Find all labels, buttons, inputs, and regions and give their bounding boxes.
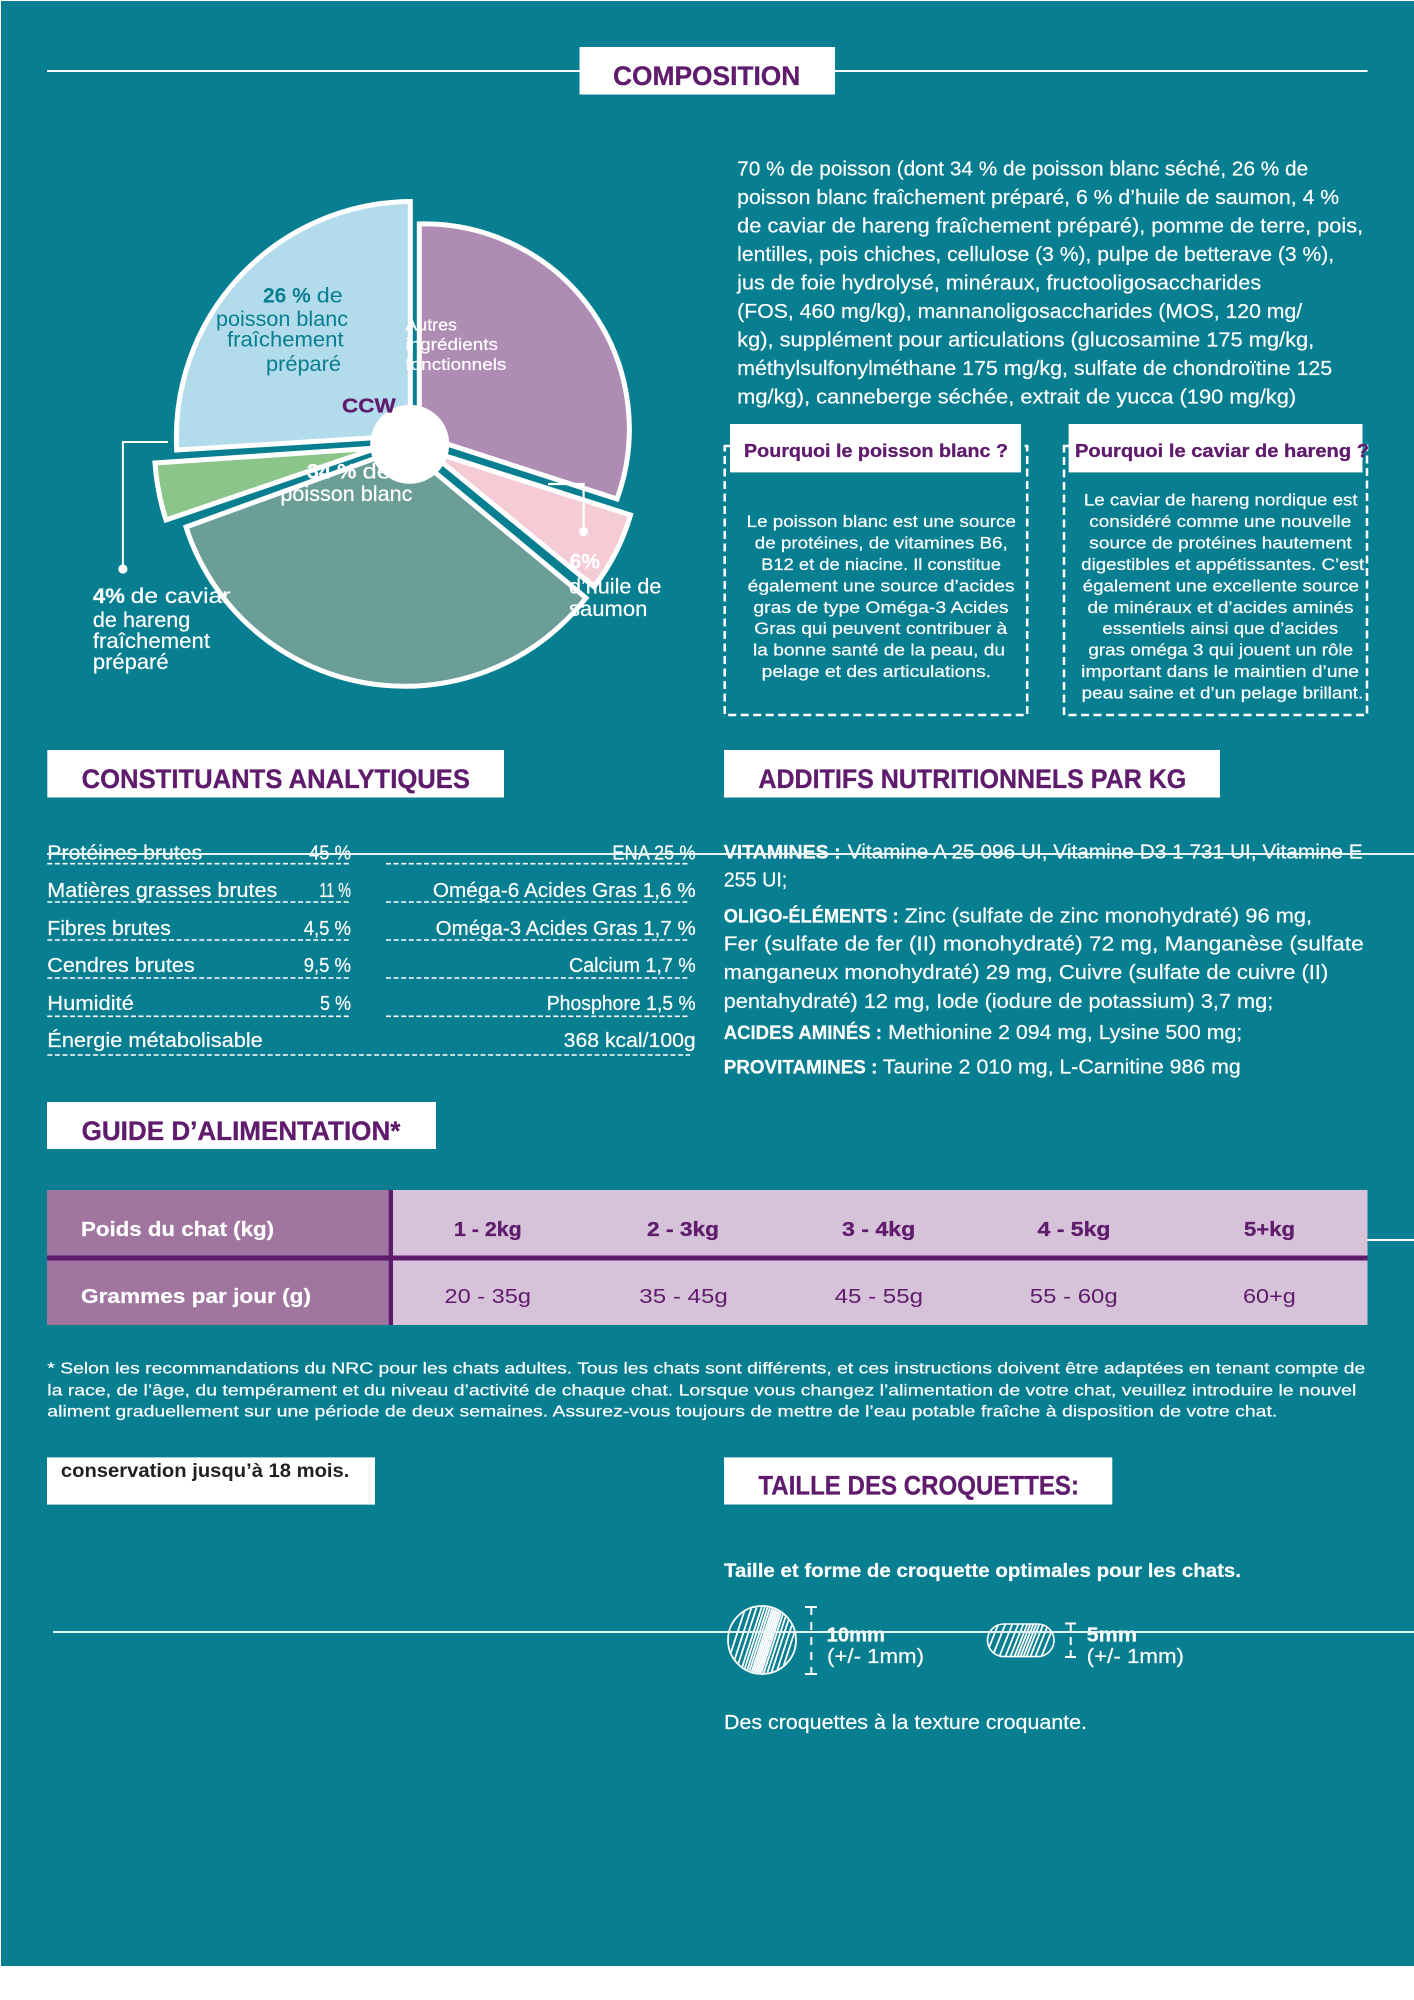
table: analytical constituents: 9,5 % — [304, 955, 351, 977]
panel text: why herring roe: peau saine et d’un pelage brillant. — [1082, 684, 1363, 702]
additives text: ACIDES AMINÉS : — [724, 1022, 882, 1044]
label: 34% dried white fish — [280, 459, 413, 506]
panel text: why white fish: pelage et des articulations. — [762, 663, 991, 681]
composition ingredients text: (FOS, 460 mg/kg), mannanoligosaccharides (MOS, 120 mg/ — [737, 300, 1303, 323]
panel text: why herring roe: de minéraux et d’acides aminés — [1088, 599, 1354, 617]
label: 4% herring roe: préparé — [93, 650, 169, 674]
panel text: why herring roe: important dans le maintien d’une — [1081, 663, 1359, 681]
label: 10mm: (+/- 1mm) — [827, 1646, 924, 1668]
row values: weights: 1 - 2kg — [454, 1219, 522, 1241]
additives text: OLIGO-ÉLÉMENTS : — [724, 905, 899, 927]
panel text: why white fish: Gras qui peuvent contribuer à — [754, 620, 1008, 638]
footnote: * Selon les recommandations du NRC pour les chats adultes. Tous les chats sont différents, et ces instructions doivent être adaptées en tenant compte de — [47, 1360, 1365, 1378]
composition ingredients text: poisson blanc fraîchement préparé, 6 % d’huile de saumon, 4 % — [737, 186, 1339, 209]
panel text: why herring roe: Le caviar de hareng nordique est — [1084, 492, 1358, 510]
label: 6% salmon oil: saumon — [569, 597, 647, 621]
table: analytical constituents: Cendres brutes — [47, 955, 195, 977]
additives text: 255 UI; — [724, 870, 787, 892]
label: 4% herring roe: 4% — [93, 584, 125, 608]
additives text: Vitamine A 25 096 UI, Vitamine D3 1 731 UI, Vitamine E — [848, 841, 1363, 863]
table: analytical constituents: Calcium 1,7 % — [569, 955, 696, 977]
pie centre hole — [370, 405, 449, 484]
label: 34% dried white fish: de — [362, 459, 391, 483]
panel text: why herring roe — [1081, 492, 1365, 702]
composition ingredients text: méthylsulfonylméthane 175 mg/kg, sulfate de chondroïtine 125 — [737, 357, 1332, 380]
panel heading: why herring roe: Pourquoi le caviar de hareng ? — [1075, 440, 1369, 461]
section heading: analytical constituents: CONSTITUANTS ANALYTIQUES — [82, 764, 470, 794]
callout: conservation: conservation jusqu’à 18 mois. — [61, 1460, 349, 1482]
label: 4% herring roe: de hareng — [93, 608, 190, 632]
table: analytical constituents: Oméga-6 Acides Gras 1,6 % — [433, 880, 696, 902]
panel: why white fish — [725, 424, 1027, 715]
additives text: Taurine 2 010 mg, L-Carnitine 986 mg — [883, 1056, 1241, 1078]
kibble intro text: Taille et forme de croquette optimales pour les chats. — [724, 1560, 1241, 1582]
panel text: why white fish: Le poisson blanc est une source — [747, 513, 1016, 531]
table: analytical constituents: 368 kcal/100g — [564, 1030, 696, 1052]
kibble texture text: Des croquettes à la texture croquante. — [724, 1712, 1087, 1734]
label: other functional ingredients — [405, 316, 506, 374]
additives text: PROVITAMINES : — [724, 1058, 877, 1078]
panel text: why herring roe: gras oméga 3 qui jouent un rôle — [1088, 642, 1353, 660]
panel text: why white fish — [747, 513, 1016, 681]
panel text: why white fish: B12 et de niacine. Il constitue — [761, 556, 1001, 574]
section heading: feeding guide: GUIDE D’ALIMENTATION* — [82, 1116, 401, 1146]
label: other functional ingredients: fonctionnels — [405, 355, 506, 374]
panel text: why herring roe: également une excellente source — [1083, 578, 1359, 596]
pie chart: composition — [93, 202, 661, 686]
row label: grams per day: Grammes par jour (g) — [81, 1286, 311, 1308]
label: 26% fresh white fish: fraîchement — [227, 328, 344, 352]
table: analytical constituents: ENA 25 % — [612, 843, 696, 865]
additives text: Fer (sulfate de fer (II) monohydraté) 72 mg, Manganèse (sulfate — [724, 934, 1364, 956]
segment: 4% herring roe — [155, 448, 377, 520]
additives text: Zinc (sulfate de zinc monohydraté) 96 mg, — [904, 905, 1312, 927]
table: analytical constituents: Matières grasses brutes — [47, 880, 277, 902]
section heading: analytical constituents — [47, 750, 504, 798]
label: 34% dried white fish: 34 % — [307, 459, 356, 483]
label: 4% herring roe: de caviar — [131, 584, 230, 608]
composition ingredients text: kg), supplément pour articulations (glucosamine 175 mg/kg, — [737, 328, 1314, 352]
section heading: kibble size — [724, 1457, 1112, 1504]
additives text: pentahydraté) 12 mg, Iode (iodure de potassium) 3,7 mg; — [724, 991, 1273, 1013]
label: 26% fresh white fish: de — [317, 283, 343, 307]
composition ingredients text: de caviar de hareng fraîchement préparé), pomme de terre, pois, — [737, 214, 1363, 238]
label: CCW: CCW — [342, 395, 396, 417]
row values: weights: 4 - 5kg — [1038, 1219, 1110, 1241]
table: analytical constituents: Fibres brutes — [47, 918, 171, 940]
row values: weights — [454, 1219, 1295, 1241]
table: analytical constituents: 45 % — [309, 843, 351, 865]
table: analytical constituents: Oméga-3 Acides Gras 1,7 % — [436, 918, 696, 940]
segment: 26% fresh white fish — [176, 202, 410, 450]
label: 4% herring roe — [93, 584, 230, 674]
label: 5mm: 5mm — [1087, 1625, 1137, 1647]
row values: grams — [444, 1286, 1296, 1308]
label: other functional ingredients: Autres — [405, 316, 457, 335]
label: 26% fresh white fish — [216, 283, 348, 376]
section heading: feeding guide — [47, 1102, 436, 1149]
row values: grams: 35 - 45g — [639, 1286, 728, 1308]
segment: 6% salmon oil — [427, 450, 630, 587]
icon: round kibble — [727, 1605, 797, 1675]
label: 6% salmon oil — [569, 549, 661, 621]
segment: 34% dried white fish — [186, 448, 586, 686]
label: other functional ingredients: ingrédients — [405, 335, 498, 354]
additives text: manganeux monohydraté) 29 mg, Cuivre (sulfate de cuivre (II) — [724, 962, 1328, 984]
row values: weights: 5+kg — [1244, 1219, 1295, 1241]
row values: weights: 3 - 4kg — [842, 1219, 915, 1241]
composition ingredients text: mg/kg), canneberge séchée, extrait de yucca (190 mg/kg) — [737, 386, 1296, 408]
table: analytical constituents: Énergie métabolisable — [47, 1029, 263, 1052]
label: 6% salmon oil: d’huile de — [569, 575, 661, 599]
panel text: why white fish: gras de type Oméga-3 Acides — [753, 599, 1009, 617]
label: 5mm — [1087, 1625, 1184, 1668]
leader: herring roe — [118, 442, 168, 574]
label: 4% herring roe: fraîchement — [93, 629, 210, 653]
label: 26% fresh white fish: poisson blanc — [216, 307, 348, 331]
composition ingredients text: jus de foie hydrolysé, minéraux, fructooligosaccharides — [736, 272, 1261, 294]
section heading: nutritional additives — [724, 750, 1220, 798]
footnote: aliment graduellement sur une période de deux semaines. Assurez-vous toujours de mettre de l’eau potable fraîche à disposition de votre chat. — [47, 1404, 1277, 1420]
footnote — [47, 1360, 1365, 1420]
panel text: why herring roe: source de protéines hautement — [1089, 534, 1352, 552]
label: 10mm: 10mm — [827, 1625, 885, 1647]
callout: conservation — [47, 1457, 375, 1505]
leader: salmon oil — [548, 484, 588, 536]
table: analytical constituents: Protéines brutes — [47, 843, 202, 865]
additives text: VITAMINES : — [724, 842, 841, 863]
panel text: why white fish: la bonne santé de la peau, du — [753, 642, 1005, 660]
table: analytical constituents: 11 % — [319, 880, 351, 902]
icon: flat kibble — [986, 1623, 1055, 1658]
panel text: why herring roe: essentiels ainsi que d’acides — [1102, 620, 1338, 638]
composition ingredients text: 70 % de poisson (dont 34 % de poisson blanc séché, 26 % de — [737, 158, 1308, 180]
table: analytical constituents — [47, 843, 696, 1055]
panel text: why white fish: de protéines, de vitamines B6, — [755, 534, 1008, 552]
row values: grams: 45 - 55g — [835, 1286, 923, 1308]
row values: grams: 55 - 60g — [1030, 1286, 1118, 1308]
section heading: kibble size: TAILLE DES CROQUETTES: — [758, 1470, 1079, 1500]
table: feeding guide — [47, 1190, 1368, 1325]
table: analytical constituents: Phosphore 1,5 % — [547, 993, 696, 1015]
dimension marker: 10mm — [805, 1607, 817, 1674]
label: 6% salmon oil: 6% — [570, 549, 600, 573]
segment: other functional ingredients — [419, 224, 629, 499]
row values: grams: 60+g — [1243, 1286, 1296, 1308]
footnote: la race, de l’âge, du tempérament et du niveau d’activité de chaque chat. Lorsque vous changez l’alimentation de votre chat, veuillez introduire le nouvel — [47, 1382, 1356, 1400]
panel heading: why white fish: Pourquoi le poisson blanc ? — [744, 440, 1008, 461]
section heading: composition: COMPOSITION — [613, 61, 800, 91]
additives text: Methionine 2 094 mg, Lysine 500 mg; — [888, 1022, 1242, 1044]
table: analytical constituents: 4,5 % — [304, 918, 351, 940]
section heading: composition — [47, 47, 1368, 94]
label: 5mm: (+/- 1mm) — [1087, 1646, 1184, 1668]
panel text: why herring roe: digestibles et appétissantes. C’est — [1081, 556, 1365, 574]
row values: weights: 2 - 3kg — [647, 1219, 719, 1241]
composition ingredients text — [736, 158, 1363, 408]
label: 34% dried white fish: poisson blanc — [280, 482, 413, 506]
composition ingredients text: lentilles, pois chiches, cellulose (3 %), pulpe de betterave (3 %), — [737, 243, 1334, 266]
row label: cat weight: Poids du chat (kg) — [81, 1219, 274, 1241]
panel: why herring roe — [1064, 424, 1369, 715]
dimension marker: 5mm — [1065, 1624, 1076, 1657]
table: analytical constituents: 5 % — [320, 993, 351, 1015]
label: 26% fresh white fish: 26 % — [263, 283, 311, 307]
panel text: why white fish: également une source d’acides — [748, 578, 1014, 596]
table: analytical constituents: Humidité — [47, 993, 134, 1015]
panel text: why herring roe: considéré comme une nouvelle — [1089, 513, 1351, 531]
label: 26% fresh white fish: préparé — [266, 352, 341, 376]
label: 10mm — [827, 1625, 924, 1668]
row values: grams: 20 - 35g — [444, 1286, 531, 1308]
section heading: nutritional additives: ADDITIFS NUTRITIONNELS PAR KG — [758, 764, 1186, 794]
additives text — [724, 841, 1364, 1078]
